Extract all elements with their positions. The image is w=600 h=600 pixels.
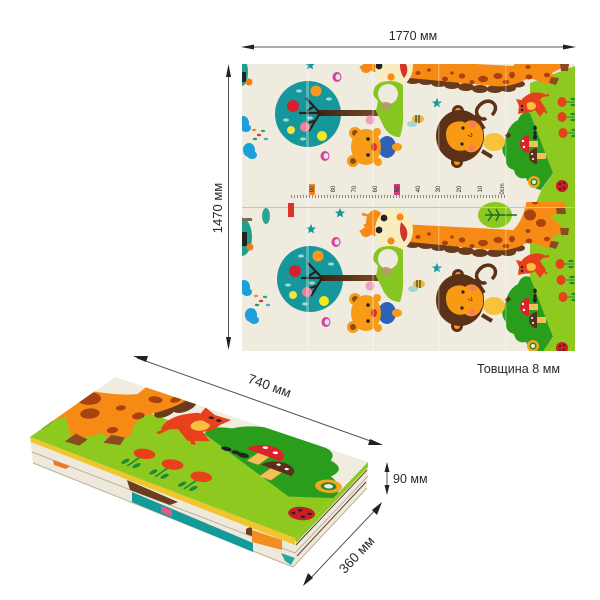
icon: flower upper	[528, 176, 540, 188]
icon: bear lower	[347, 282, 402, 333]
panel: upper half illustration	[242, 64, 575, 192]
icon: ant upper	[533, 126, 537, 140]
icon: red mushroom lower	[520, 298, 538, 316]
yellow layer	[30, 437, 295, 545]
ruler numbers: 80	[331, 185, 337, 192]
icon: tulip three	[558, 128, 575, 138]
label: 90: 90 мм	[393, 472, 428, 486]
icon: bear upper	[347, 116, 402, 167]
icon: tulip lower one	[556, 259, 574, 269]
arrow: 360 width	[303, 502, 382, 586]
label: 360: 360 мм	[336, 533, 377, 576]
icon: mini tree	[478, 202, 517, 228]
folded mat photo	[0, 232, 431, 567]
icon: monkey upper	[436, 101, 510, 168]
icon: blue blob two	[243, 143, 257, 159]
icon: bird bush upper	[373, 81, 403, 137]
face flower	[310, 477, 347, 496]
folded mat body	[30, 437, 368, 567]
face tulip three	[175, 469, 216, 492]
icon: tulip one	[558, 97, 576, 107]
icon: leaves lower	[254, 295, 270, 306]
label: 740: 740 мм	[246, 371, 293, 400]
giraffe lower	[359, 202, 569, 257]
ruler numbers: 20	[457, 185, 463, 192]
side layer shading	[32, 452, 368, 567]
ruler badge 90	[309, 184, 315, 195]
ruler numbers: 0cm	[500, 183, 506, 195]
icon: blue blob lower two	[245, 308, 259, 324]
hedgehog edge	[242, 64, 252, 86]
face grass	[0, 382, 367, 556]
icon: monkey lower	[436, 265, 510, 332]
ruler badge 50	[394, 184, 400, 195]
label: thickness: Товщина 8 мм	[477, 362, 560, 376]
side right edge	[296, 470, 367, 556]
icon: ladybug upper	[556, 180, 568, 192]
face brown mushroom	[250, 458, 301, 484]
icon: ant lower	[533, 288, 537, 303]
arrow: 740 length	[133, 356, 383, 445]
icon: tulip lower three	[558, 292, 577, 302]
fold lines	[306, 64, 506, 351]
icon: brown mushroom lower	[529, 312, 546, 328]
icon: acorn lower pink	[322, 317, 330, 327]
arrow: 1470 height	[226, 64, 231, 350]
side print: brown	[127, 480, 178, 505]
face tulip two	[146, 457, 187, 480]
face hill	[175, 409, 383, 509]
face mini tree	[80, 335, 177, 388]
flat mat photo	[242, 64, 575, 351]
side print: brown corner	[246, 526, 252, 536]
icon: acorn pink	[320, 151, 330, 161]
icon: star lower one	[432, 263, 442, 272]
face ladybug	[283, 504, 320, 523]
ruler numbers: 90	[310, 185, 316, 192]
hill lower	[502, 276, 553, 354]
icon: acorn	[332, 72, 342, 82]
label: 1470: 1470 мм	[210, 183, 225, 233]
label: 1770: 1770 мм	[389, 29, 437, 43]
icon: blue blob lower	[238, 280, 252, 296]
icon: tree lower	[277, 246, 380, 312]
arrow: 1770 width	[241, 44, 576, 50]
icon: star upper	[432, 98, 442, 108]
face squirrel	[153, 403, 239, 449]
ruler numbers: 10	[478, 185, 484, 192]
face red mushroom	[236, 441, 292, 469]
side print: pink	[161, 506, 172, 517]
teal cactus	[262, 208, 270, 224]
ruler badge 100	[288, 203, 294, 217]
ruler numbers: 70	[352, 185, 358, 192]
icon: blue blob	[242, 116, 251, 132]
ruler numbers: 60	[373, 185, 379, 192]
ruler numbers: 50	[395, 185, 401, 192]
side print: block	[252, 530, 282, 550]
ruler numbers: 40	[416, 185, 422, 192]
face ant	[219, 445, 251, 459]
grass field	[530, 66, 575, 351]
side print: orange	[53, 460, 70, 469]
icon: leaves	[252, 129, 268, 140]
ruler	[288, 183, 506, 217]
side print: teal wedge	[281, 553, 295, 565]
face tulip one	[118, 446, 159, 470]
hedgehog edge lower	[232, 218, 254, 256]
side print: teal band	[132, 492, 253, 552]
arrow: 90 height	[384, 462, 390, 495]
face giraffe	[0, 232, 376, 462]
icon: bird bush lower	[373, 246, 403, 302]
icon: star top	[306, 64, 314, 70]
icon: acorn lower	[332, 237, 340, 247]
icon: ladybug lower	[556, 342, 568, 354]
icon: squirrel upper	[516, 92, 549, 117]
icon: star lower three	[306, 224, 316, 234]
icon: tulip two	[558, 112, 576, 122]
icon: star lower two	[335, 208, 345, 218]
green right edge	[295, 462, 368, 543]
hill upper	[502, 112, 553, 190]
panel: flat mat background	[242, 64, 575, 351]
giraffe upper	[359, 64, 569, 93]
icon: tree upper	[275, 81, 378, 147]
mat top face	[0, 232, 431, 556]
ruler numbers	[310, 183, 506, 195]
icon: red mushroom upper	[520, 135, 538, 153]
icon: flower lower	[527, 340, 539, 352]
icon: bee lower	[408, 280, 425, 292]
icon: bee upper	[407, 115, 424, 127]
panel: lower half illustration	[242, 202, 575, 351]
ruler numbers: 30	[436, 185, 442, 192]
icon: squirrel lower	[516, 253, 549, 278]
icon: brown mushroom upper	[529, 148, 546, 164]
icon: tulip lower two	[556, 275, 575, 285]
